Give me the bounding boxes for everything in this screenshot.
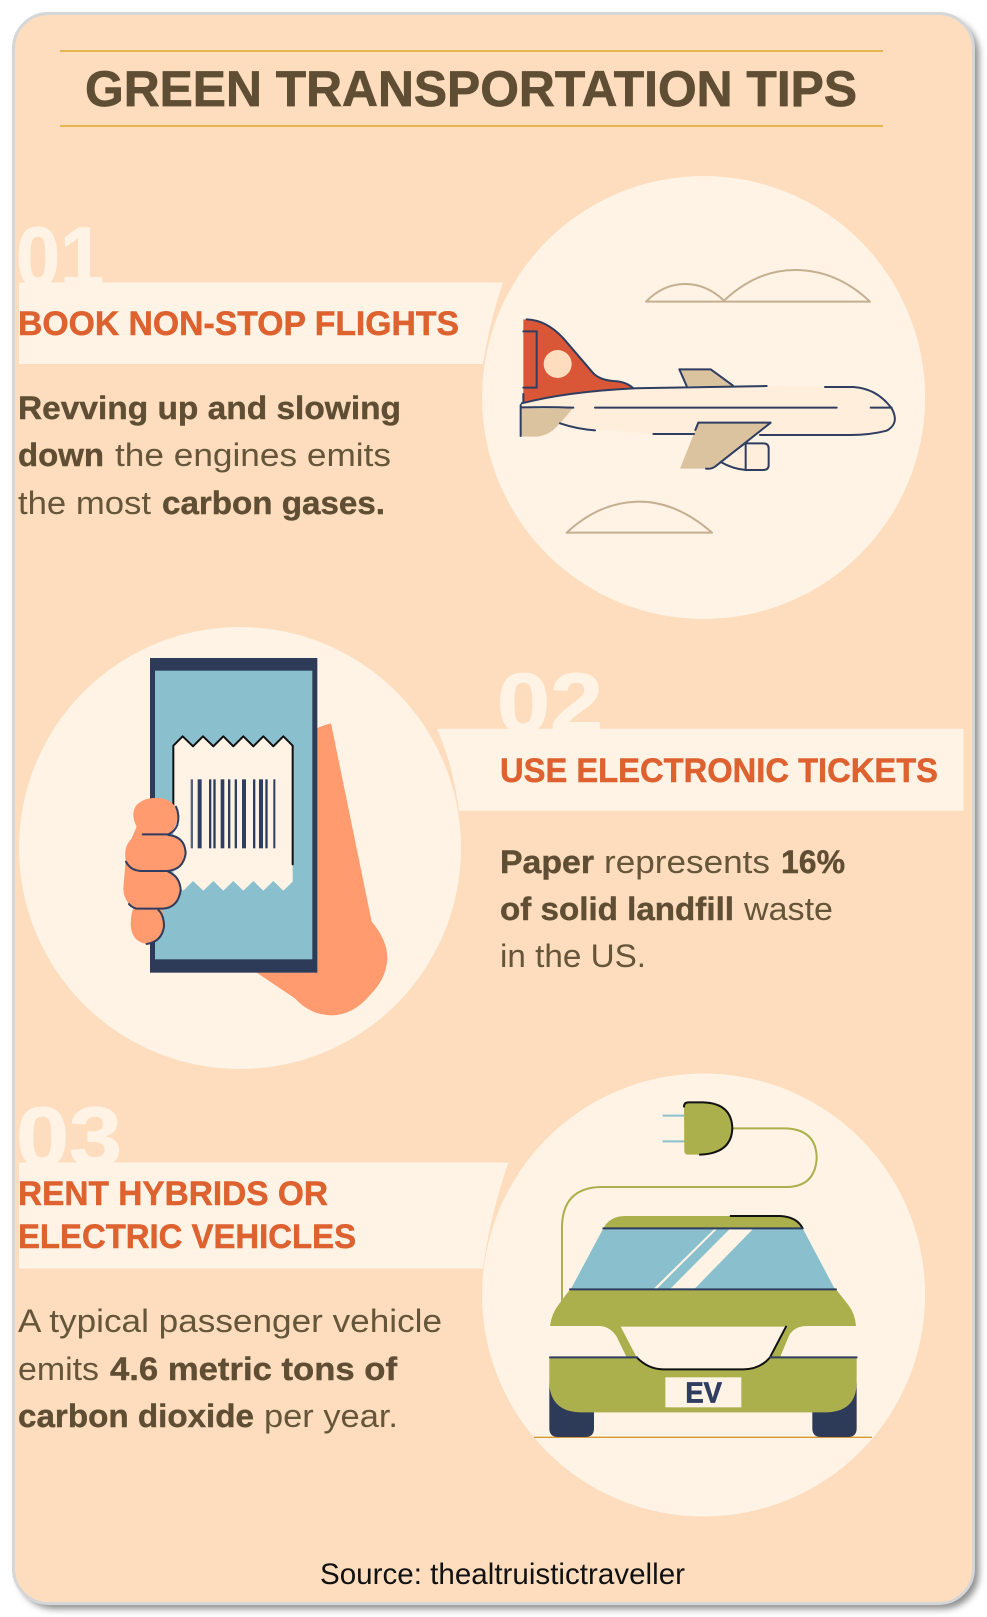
stabilizer <box>521 408 573 437</box>
section 1: body text: the engines emits <box>115 437 391 473</box>
section 3: heading: RENT HYBRIDS OR <box>18 1175 328 1213</box>
section 2: body text: 16% <box>781 844 845 880</box>
section 1: number: 01 <box>16 210 104 304</box>
plug prongs <box>663 1116 686 1141</box>
section 2: heading: USE ELECTRONIC TICKETS <box>500 752 938 790</box>
icon: airplane and clouds <box>521 270 895 533</box>
section 3: circle background <box>482 1074 925 1516</box>
plug <box>684 1102 732 1155</box>
cord <box>562 1128 817 1303</box>
section 3: body text: A typical passenger vehicle <box>18 1303 442 1339</box>
arm <box>257 723 387 1015</box>
car outlines <box>550 1216 857 1369</box>
license plate: EV <box>685 1378 722 1410</box>
engine <box>720 443 769 470</box>
tail fin <box>523 319 633 403</box>
windshield reflections <box>654 1229 753 1288</box>
outlines <box>521 319 895 470</box>
section 3: body text <box>18 1303 442 1434</box>
section 1: body text: carbon gases. <box>162 485 385 521</box>
section 1: circle background <box>482 176 925 619</box>
windshield <box>571 1228 835 1289</box>
car upper body <box>550 1289 856 1357</box>
section 2: number: 02 <box>497 656 603 750</box>
source credit: Source: thealtruistictraveller <box>320 1558 685 1591</box>
section 1: body text: down <box>18 437 104 473</box>
section 3: heading: ELECTRIC VEHICLES <box>18 1218 356 1256</box>
section 2: body text: of solid landfill <box>500 891 734 927</box>
fuselage <box>521 386 895 435</box>
title: GREEN TRANSPORTATION TIPS <box>85 61 857 117</box>
section 2: heading banner <box>437 729 964 811</box>
section 2: body text: in the US. <box>500 938 646 974</box>
section 3: number: 03 <box>16 1090 122 1184</box>
section 2: body text: Paper <box>500 844 594 880</box>
icon: electric car with plug <box>534 1102 872 1437</box>
section 3: body text: emits <box>18 1351 99 1387</box>
phone screen <box>155 671 312 959</box>
section 1: heading: BOOK NON-STOP FLIGHTS <box>18 305 459 343</box>
ground line <box>534 1435 872 1439</box>
section 3: heading <box>18 1175 356 1256</box>
section 2: body text: waste <box>743 891 833 927</box>
license plate <box>665 1377 741 1410</box>
wheels <box>549 1383 857 1437</box>
section 2: body text: represents <box>604 844 770 880</box>
car lower body <box>549 1357 857 1412</box>
fingers <box>123 798 185 944</box>
section 3: body text: 4.6 metric tons of <box>110 1351 397 1387</box>
ticket <box>173 736 293 891</box>
section 1: body text <box>18 390 401 521</box>
roof <box>603 1216 803 1228</box>
wing <box>680 423 771 469</box>
section 1: heading banner <box>19 282 503 364</box>
tail window <box>544 350 572 378</box>
section 2: body text <box>500 844 845 974</box>
barcode <box>191 779 275 848</box>
section 3: heading banner <box>19 1162 508 1268</box>
section 1: body text: Revving up and slowing <box>18 390 401 426</box>
section 1: body text: the most <box>18 485 151 521</box>
top fin <box>679 369 733 386</box>
phone <box>150 658 317 973</box>
section 3: body text: carbon dioxide <box>18 1398 254 1434</box>
section 2: circle background <box>19 627 461 1069</box>
clouds <box>567 270 870 533</box>
icon: hand holding phone with ticket <box>123 658 387 1015</box>
section 3: body text: per year. <box>264 1398 398 1434</box>
